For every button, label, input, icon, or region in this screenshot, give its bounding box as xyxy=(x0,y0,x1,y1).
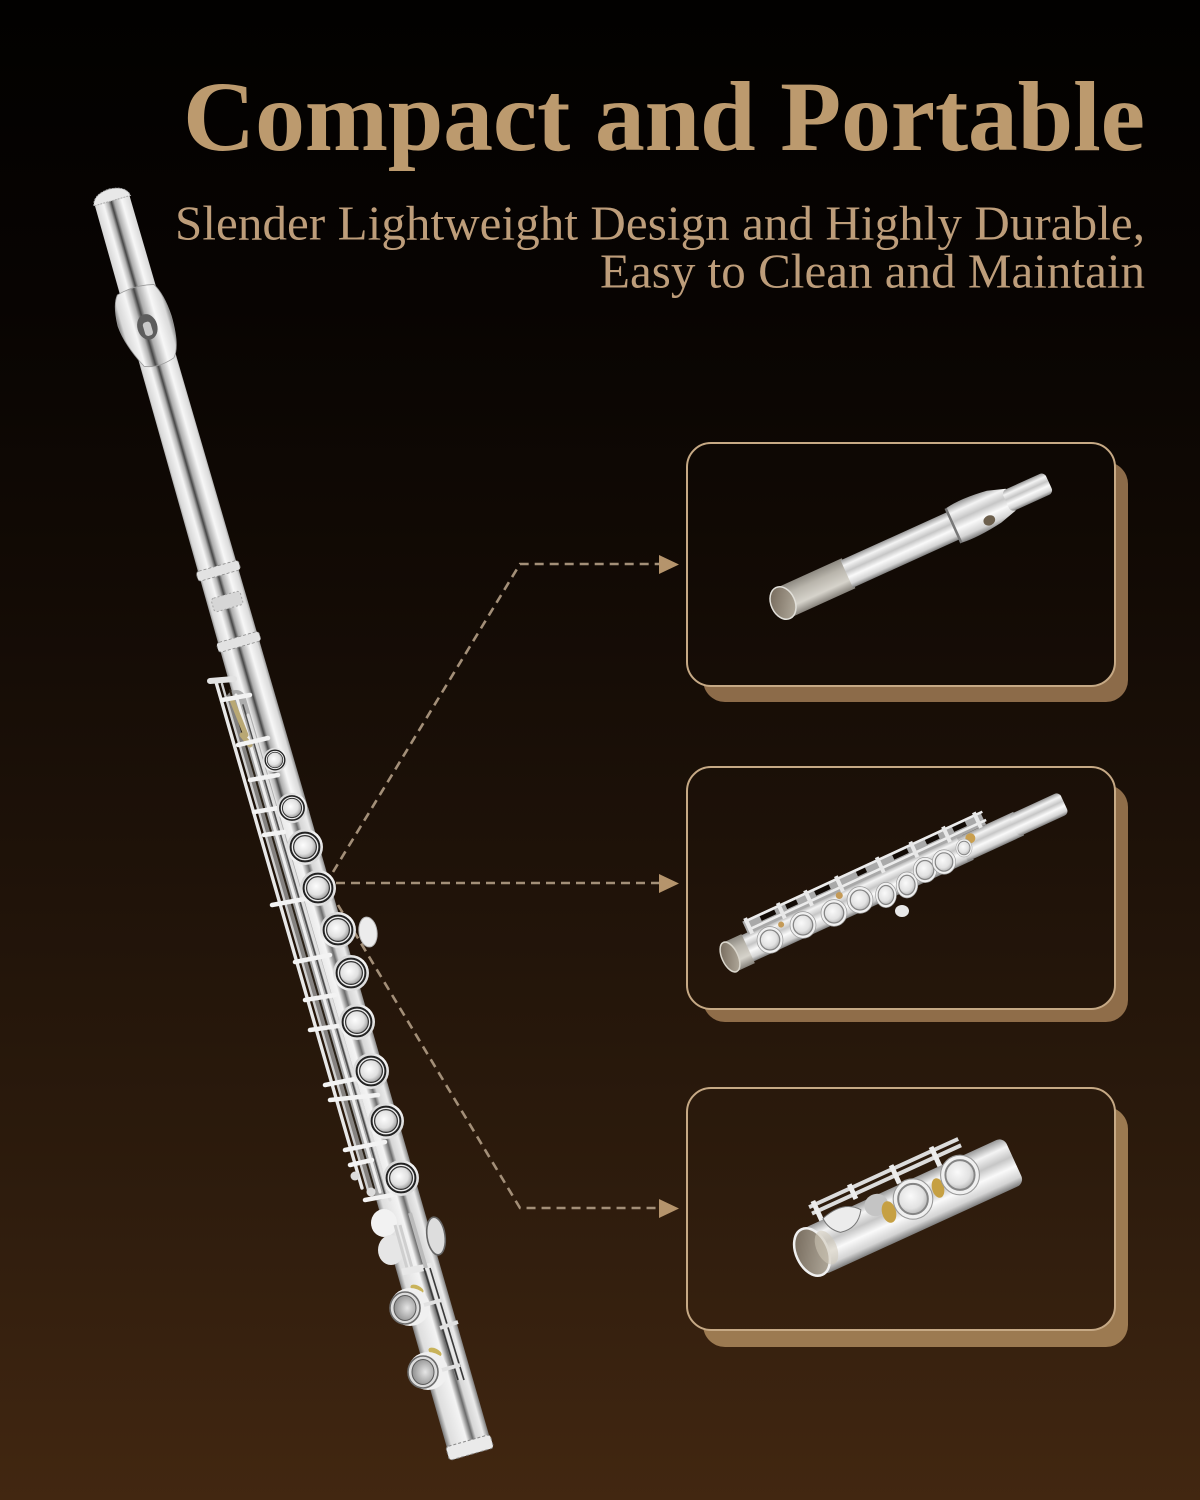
dashed connector to head joint xyxy=(333,564,660,872)
key rods xyxy=(210,679,392,1200)
foot key upper xyxy=(390,1288,430,1326)
dashed connector to foot joint xyxy=(338,905,660,1208)
arrow to foot joint xyxy=(659,1199,679,1218)
arrow to head joint xyxy=(659,555,679,574)
subtitle: Slender Lightweight Design and Highly Durable, xyxy=(175,196,1145,250)
embouchure hole xyxy=(134,312,161,342)
main flute xyxy=(81,182,496,1462)
panel: body joint xyxy=(687,767,1128,1022)
subtitle: Easy to Clean and Maintain xyxy=(600,244,1145,298)
flute tube xyxy=(81,182,496,1462)
flute head joint photo xyxy=(764,464,1057,626)
panel: head joint xyxy=(687,443,1128,702)
thumb button xyxy=(357,916,379,948)
foot end ring xyxy=(446,1434,494,1461)
tone hole keys xyxy=(263,748,419,1196)
engraved logo xyxy=(211,591,243,612)
crown xyxy=(91,184,130,206)
foot key lower xyxy=(408,1352,448,1390)
title: Compact and Portable xyxy=(183,61,1145,172)
tenon bands xyxy=(196,560,241,582)
panel: foot joint xyxy=(687,1088,1128,1347)
dashed connector to body joint xyxy=(336,882,660,884)
lip plate xyxy=(109,280,183,373)
subtitle xyxy=(175,196,1145,298)
foot joint keys xyxy=(371,1209,464,1390)
flute body joint photo xyxy=(711,776,1071,975)
flute foot joint photo xyxy=(778,1118,1025,1282)
arrow to body joint xyxy=(659,874,679,893)
